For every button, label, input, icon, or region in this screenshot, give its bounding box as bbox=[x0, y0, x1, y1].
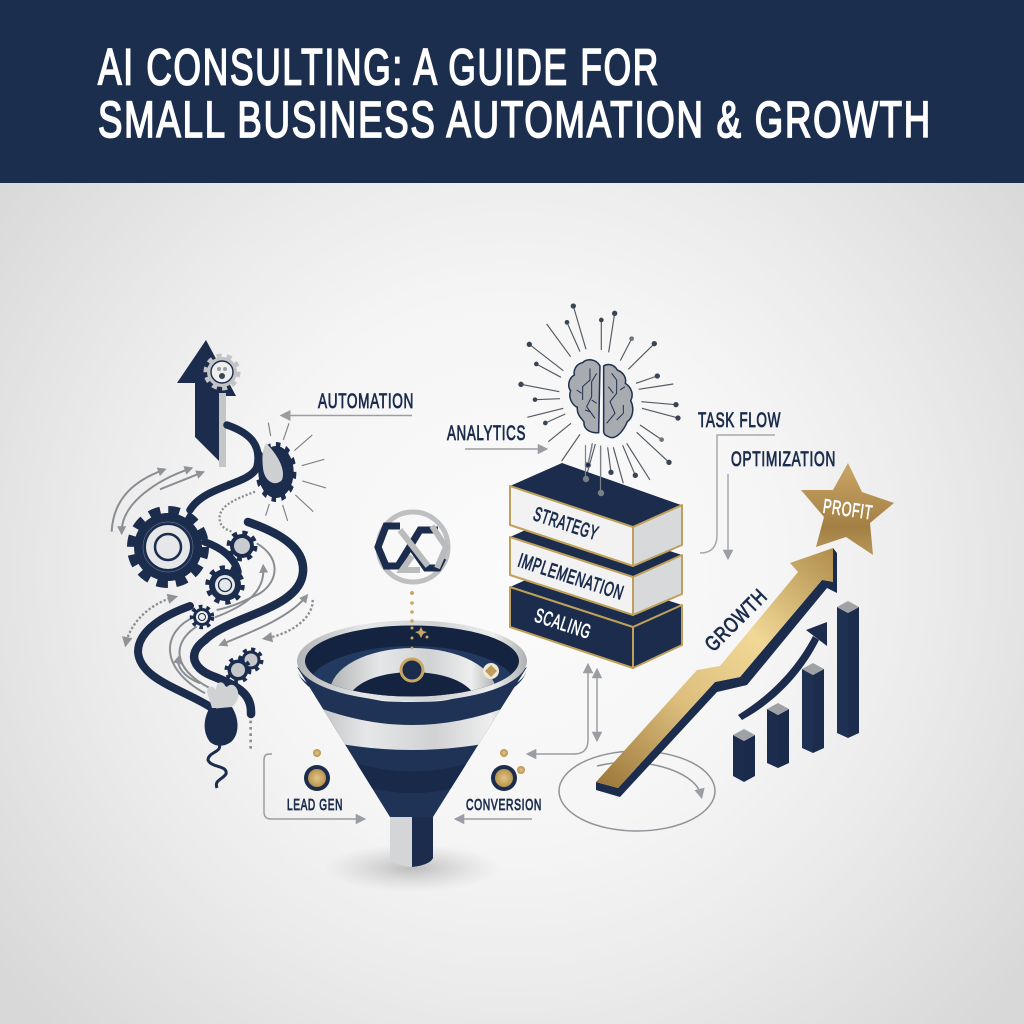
funnel bbox=[290, 591, 535, 892]
label: optimization bbox=[728, 448, 836, 556]
brain with rays bbox=[518, 303, 681, 493]
upward arrow bbox=[177, 340, 236, 467]
bar 1 bbox=[733, 729, 755, 782]
logo badge bbox=[378, 512, 448, 582]
conversion bbox=[458, 749, 542, 819]
funnel interior bbox=[305, 626, 519, 696]
bar 2 bbox=[767, 703, 789, 768]
label: analytics: ANALYTICS bbox=[447, 422, 526, 445]
label: optimization: OPTIMIZATION bbox=[731, 448, 836, 471]
title bbox=[98, 38, 932, 148]
conversion: CONVERSION bbox=[466, 797, 542, 814]
gear: large bbox=[132, 511, 204, 583]
falling gold dots bbox=[410, 591, 428, 649]
label: analytics bbox=[447, 422, 544, 449]
funnel shadow bbox=[324, 844, 500, 892]
block: strategy: STRATEGY bbox=[531, 503, 601, 545]
spark rays bbox=[266, 423, 326, 521]
trend arrow bbox=[738, 622, 827, 720]
label: task flow bbox=[698, 409, 781, 553]
block: implementation bbox=[510, 515, 682, 615]
rays bbox=[518, 303, 681, 493]
gear: tiny bbox=[192, 607, 212, 627]
base orbit ellipse bbox=[559, 751, 715, 831]
bar 3 bbox=[802, 663, 824, 753]
gold growth arrow bbox=[596, 548, 837, 797]
block: scaling bbox=[510, 565, 682, 668]
profit star: PROFIT bbox=[822, 496, 874, 524]
gear: small upper bbox=[229, 533, 255, 559]
title: AI CONSULTING: A GUIDE FOR bbox=[98, 38, 660, 96]
bar chart bbox=[733, 601, 859, 782]
stacked blocks bbox=[510, 463, 682, 668]
label: task flow: TASK FLOW bbox=[698, 409, 781, 432]
funnel rim bbox=[297, 620, 527, 702]
gear: silver on arrow bbox=[206, 356, 238, 388]
profit star bbox=[801, 463, 894, 555]
automation workflow illustration bbox=[112, 340, 326, 788]
gear: spark gear bbox=[258, 443, 294, 499]
brain connector lines on stack bbox=[583, 445, 604, 496]
label: growth: GROWTH bbox=[701, 585, 772, 656]
curved navy pipelines bbox=[138, 425, 303, 714]
gold ring bbox=[401, 659, 423, 681]
grey flow arrows bbox=[112, 469, 313, 751]
root bulb bbox=[205, 682, 238, 788]
funnel cone bbox=[297, 667, 527, 817]
title banner bbox=[0, 0, 1024, 183]
funnel spout bbox=[390, 815, 433, 867]
brain bbox=[569, 360, 633, 438]
label: automation: AUTOMATION bbox=[318, 390, 414, 413]
lead gen bbox=[264, 749, 362, 819]
gears: twin bbox=[226, 650, 262, 682]
bar 4 bbox=[837, 601, 859, 738]
block: implementation: IMPLEMENATION bbox=[515, 550, 627, 605]
cream gem bbox=[483, 663, 499, 679]
block: strategy bbox=[510, 463, 682, 566]
lead gen: LEAD GEN bbox=[287, 797, 343, 814]
block: scaling: SCALING bbox=[532, 605, 594, 644]
gear: medium bbox=[208, 568, 242, 602]
connector arrows to stack bbox=[530, 667, 597, 754]
label: automation bbox=[284, 390, 414, 416]
